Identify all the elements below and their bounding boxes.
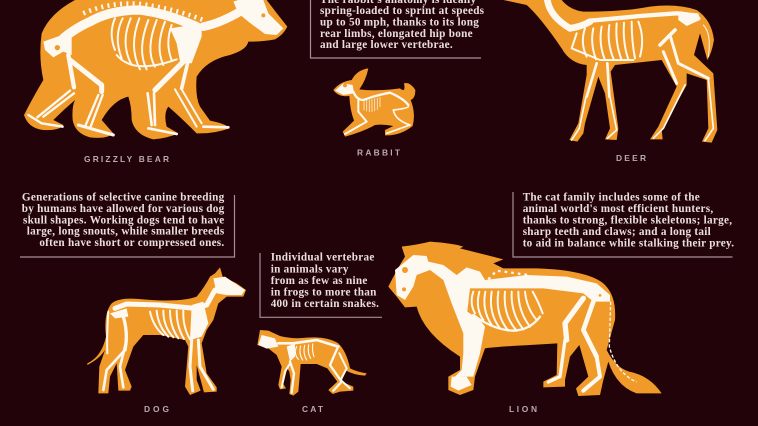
label: dog: DOG	[144, 404, 169, 414]
callout rule	[260, 253, 382, 317]
label: deer: DEER	[616, 153, 646, 163]
vertebrae fact text: from as few as nine	[271, 275, 368, 287]
rabbit fact text: rear limbs, elongated hip bone	[320, 28, 473, 40]
deer silhouette and skeleton	[503, 0, 717, 143]
label: cat: CAT	[302, 404, 324, 414]
label: lion: LION	[509, 404, 537, 414]
label: grizzly bear: GRIZZLY BEAR	[84, 154, 169, 164]
rabbit fact text: and large lower vertebrae.	[320, 39, 453, 51]
vertebrae fact text: in animals vary	[271, 263, 349, 275]
vertebrae fact text: Individual vertebrae	[271, 252, 375, 264]
rabbit silhouette and skeleton	[333, 68, 415, 137]
dog fact text: large, long snouts, while smaller breeds	[27, 226, 225, 238]
callout rule	[310, 0, 481, 58]
vertebrae fact text: in frogs to more than	[271, 286, 377, 298]
cat silhouette and skeleton	[257, 330, 367, 396]
lion fact text: The cat family includes some of the	[523, 192, 700, 204]
lion silhouette and skeleton	[388, 242, 662, 396]
panel: grizzly bear	[24, 0, 287, 164]
dog fact text: skull shapes. Working dogs tend to have	[23, 214, 224, 226]
bear silhouette and skeleton	[24, 0, 287, 139]
dog fact text: often have short or compressed ones.	[39, 237, 224, 249]
panel: cat	[257, 330, 367, 414]
panel: lion fact callout	[513, 192, 734, 257]
lion fact text: sharp teeth and claws; and a long tail	[523, 226, 711, 238]
panel: rabbit fact callout	[310, 0, 485, 58]
lion fact text: to aid in balance while stalking their prey.	[523, 237, 734, 249]
lion fact text: animal world's most efficient hunters,	[523, 203, 714, 215]
panel: dog	[87, 267, 246, 414]
panel: deer	[503, 0, 717, 163]
callout rule	[20, 195, 234, 257]
lion fact text: thanks to strong, flexible skeletons; large,	[523, 214, 732, 226]
rabbit fact text: spring-loaded to sprint at speeds	[320, 5, 485, 17]
dog fact text: Generations of selective canine breeding	[22, 192, 225, 204]
dog fact text: by humans have allowed for various dog	[22, 203, 225, 215]
label: rabbit: RABBIT	[357, 148, 401, 158]
vertebrae fact text: 400 in certain snakes.	[271, 298, 379, 310]
callout rule	[513, 192, 732, 257]
panel: dog fact callout	[20, 192, 234, 257]
panel: rabbit	[333, 68, 415, 158]
panel: lion	[388, 242, 662, 414]
panel: vertebrae fact callout	[260, 252, 382, 317]
rabbit fact text: up to 50 mph, thanks to its long	[320, 16, 479, 28]
dog silhouette and skeleton	[87, 267, 246, 395]
